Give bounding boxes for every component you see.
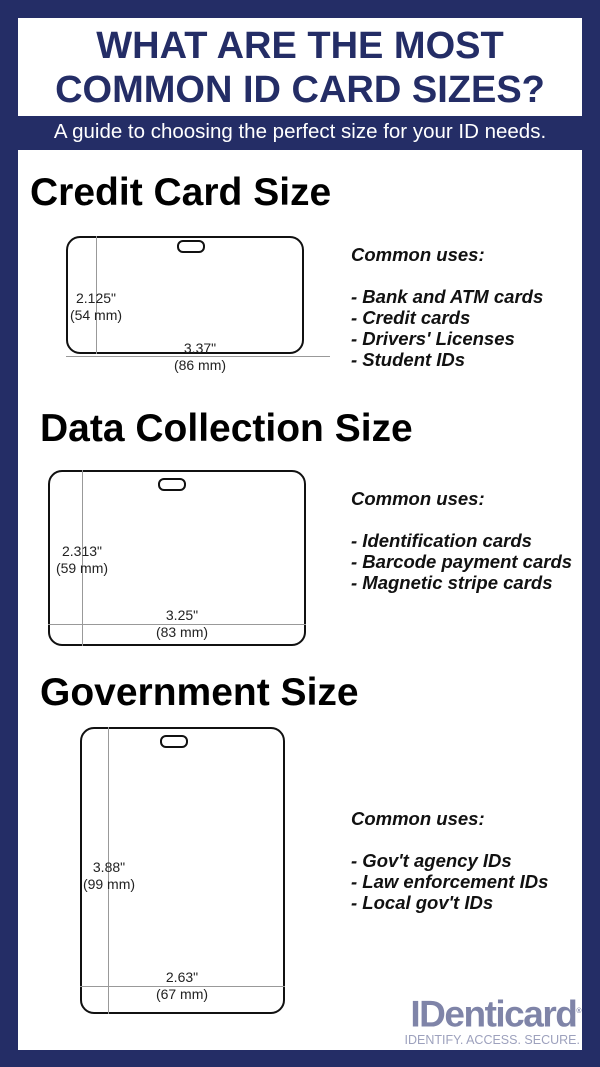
heading: data collection size: Data Collection Size: [40, 407, 413, 450]
logo: IDenticard: IDenticard®: [410, 993, 580, 1034]
uses: data collection: - Barcode payment cards: [351, 551, 572, 572]
card diagram: government: 3.88": [93, 859, 125, 875]
uses: data collection: - Identification cards: [351, 530, 532, 551]
title box: COMMON ID CARD SIZES?: [55, 69, 545, 111]
card diagram: credit card: (86 mm): [174, 357, 226, 373]
card diagram: government: (67 mm): [156, 986, 208, 1002]
uses: government: - Local gov't IDs: [351, 892, 493, 913]
card diagram: data collection: 2.313": [62, 543, 102, 559]
card diagram: data collection: (83 mm): [156, 624, 208, 640]
card diagram: data collection: [48, 470, 306, 646]
card diagram: credit card: [66, 236, 330, 373]
uses: government: - Gov't agency IDs: [351, 850, 512, 871]
uses: government: Common uses:: [351, 808, 485, 829]
heading: government size: Government Size: [40, 671, 359, 714]
card diagram: credit card: 3.37": [184, 340, 216, 356]
subtitle: A guide to choosing the perfect size for your ID needs.: [54, 120, 546, 143]
title box: [18, 18, 582, 116]
uses: credit card: Common uses:: [351, 244, 485, 265]
uses: government: [351, 808, 548, 913]
uses: credit card: - Bank and ATM cards: [351, 286, 543, 307]
uses: credit card: - Drivers' Licenses: [351, 328, 515, 349]
uses: data collection: Common uses:: [351, 488, 485, 509]
card diagram: government: [80, 727, 285, 1014]
title box: WHAT ARE THE MOST: [96, 25, 504, 67]
uses: credit card: - Student IDs: [351, 349, 465, 370]
white body panel: [18, 150, 582, 1050]
uses: data collection: - Magnetic stripe cards: [351, 572, 553, 593]
card diagram: data collection: 3.25": [166, 607, 198, 623]
card diagram: data collection: (59 mm): [56, 560, 108, 576]
card diagram: credit card: (54 mm): [70, 307, 122, 323]
uses: data collection: [351, 488, 572, 593]
card diagram: credit card: 2.125": [76, 290, 116, 306]
heading: credit card size: Credit Card Size: [30, 171, 331, 214]
uses: credit card: - Credit cards: [351, 307, 470, 328]
card diagram: government: 2.63": [166, 969, 198, 985]
uses: credit card: [351, 244, 543, 370]
uses: government: - Law enforcement IDs: [351, 871, 548, 892]
card diagram: government: (99 mm): [83, 876, 135, 892]
logo: IDenticard: IDENTIFY. ACCESS. SECURE.: [404, 1033, 580, 1047]
